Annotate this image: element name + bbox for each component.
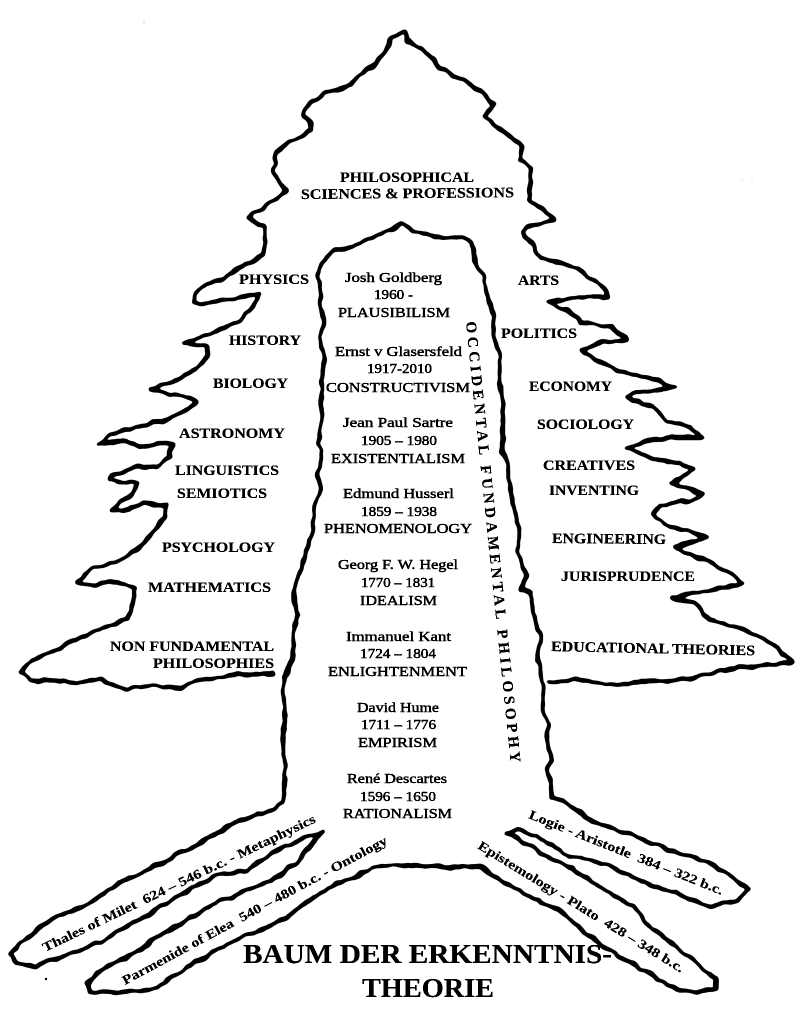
philosopher: Sartre: Jean Paul Sartre — [343, 415, 453, 430]
philosopher: Husserl: 1859 – 1938 — [361, 504, 437, 519]
philosopher: Sartre: EXISTENTIALISM — [331, 451, 465, 466]
crown heading: PHILOSOPHICAL — [340, 170, 474, 186]
philosopher: Hume — [357, 700, 439, 750]
label: semiotics: SEMIOTICS — [177, 486, 267, 502]
label: jurisprudence: JURISPRUDENCE — [561, 569, 695, 585]
root label: Thales: Thales of Milet 624 – 546 b.c. - Metaphysics — [40, 811, 318, 955]
title — [243, 939, 612, 1003]
root label: Plato: Epistemology - Plato 428 – 348 b.c. — [475, 838, 687, 975]
philosopher: Kant: Immanuel Kant — [346, 629, 451, 644]
philosopher: Hegel: 1770 – 1831 — [361, 575, 435, 590]
philosopher: Hume: David Hume — [357, 700, 439, 715]
crown heading — [301, 170, 514, 203]
label: sociology: SOCIOLOGY — [537, 417, 635, 433]
philosopher: Glasersfeld: CONSTRUCTIVISM — [326, 380, 470, 395]
philosopher: Kant: ENLIGHTENMENT — [328, 664, 468, 679]
label: physics: PHYSICS — [239, 272, 309, 288]
philosopher: Goldberg — [338, 270, 450, 320]
philosopher: Husserl — [324, 486, 472, 536]
philosopher: Glasersfeld: Ernst v Glasersfeld — [335, 344, 462, 359]
philosopher: Glasersfeld — [326, 344, 470, 395]
trunk philosophers — [324, 270, 472, 821]
label: non fundamental philosophies — [110, 639, 274, 672]
label: non fundamental philosophies: PHILOSOPHIES — [153, 656, 274, 672]
label: politics: POLITICS — [501, 326, 577, 342]
philosopher: Hegel — [338, 557, 458, 608]
label: mathematics: MATHEMATICS — [148, 580, 271, 596]
label: history: HISTORY — [229, 333, 302, 349]
root label: Parmenides: Parmenide of Elea 540 – 480 b.c. - Ontology — [119, 832, 390, 988]
root label: Aristotle: Logie - Aristotle 384 – 322 b.c. — [527, 807, 726, 898]
philosopher: Goldberg: Josh Goldberg — [345, 270, 442, 285]
label: biology: BIOLOGY — [213, 376, 289, 392]
philosopher: Goldberg: 1960 - — [374, 287, 414, 302]
philosopher: Descartes: René Descartes — [347, 771, 447, 786]
label: arts: ARTS — [518, 273, 559, 289]
crown heading: SCIENCES & PROFESSIONS — [301, 185, 514, 203]
label: inventing: INVENTING — [549, 483, 639, 499]
philosopher: Descartes — [343, 771, 452, 821]
philosopher: Hegel: IDEALISM — [360, 593, 437, 608]
philosopher: Husserl: Edmund Husserl — [343, 486, 454, 501]
philosopher: Kant: 1724 – 1804 — [360, 646, 436, 661]
philosopher: Kant — [328, 629, 468, 679]
right branch labels — [501, 273, 755, 659]
crown right edge — [404, 33, 792, 685]
philosopher: Hume: 1711 – 1776 — [361, 717, 436, 732]
label: non fundamental philosophies: NON FUNDAMENTAL — [110, 639, 274, 655]
philosopher: Descartes: 1596 – 1650 — [360, 789, 436, 804]
title: THEORIE — [362, 973, 494, 1003]
left branch labels — [110, 272, 309, 672]
crown left edge — [20, 33, 402, 690]
tree crown outline — [20, 33, 792, 690]
label: economy: ECONOMY — [529, 379, 613, 395]
title: BAUM DER ERKENNTNIS- — [243, 939, 612, 969]
label: creatives: CREATIVES — [543, 458, 635, 474]
label: psychology: PSYCHOLOGY — [162, 540, 276, 556]
philosopher: Goldberg: PLAUSIBILISM — [338, 305, 450, 320]
philosopher: Hume: EMPIRISM — [358, 735, 437, 750]
label: astronomy: ASTRONOMY — [179, 426, 286, 442]
philosopher: Sartre — [331, 415, 465, 466]
label: educational theories: EDUCATIONAL THEORIES — [551, 639, 755, 659]
label: engineering: ENGINEERING — [552, 531, 666, 548]
philosopher: Sartre: 1905 – 1980 — [361, 433, 437, 448]
trunk and four roots outline — [10, 223, 749, 993]
philosopher: Glasersfeld: 1917-2010 — [367, 361, 432, 376]
vertical trunk label: OCCIDENTAL FUNDAMENTAL PHILOSOPHY — [462, 321, 523, 763]
philosopher: Descartes: RATIONALISM — [343, 806, 452, 821]
all text labels — [40, 170, 755, 1003]
philosopher: Husserl: PHENOMENOLOGY — [324, 521, 472, 536]
philosopher: Hegel: Georg F. W. Hegel — [338, 557, 458, 572]
label: linguistics: LINGUISTICS — [175, 463, 279, 479]
